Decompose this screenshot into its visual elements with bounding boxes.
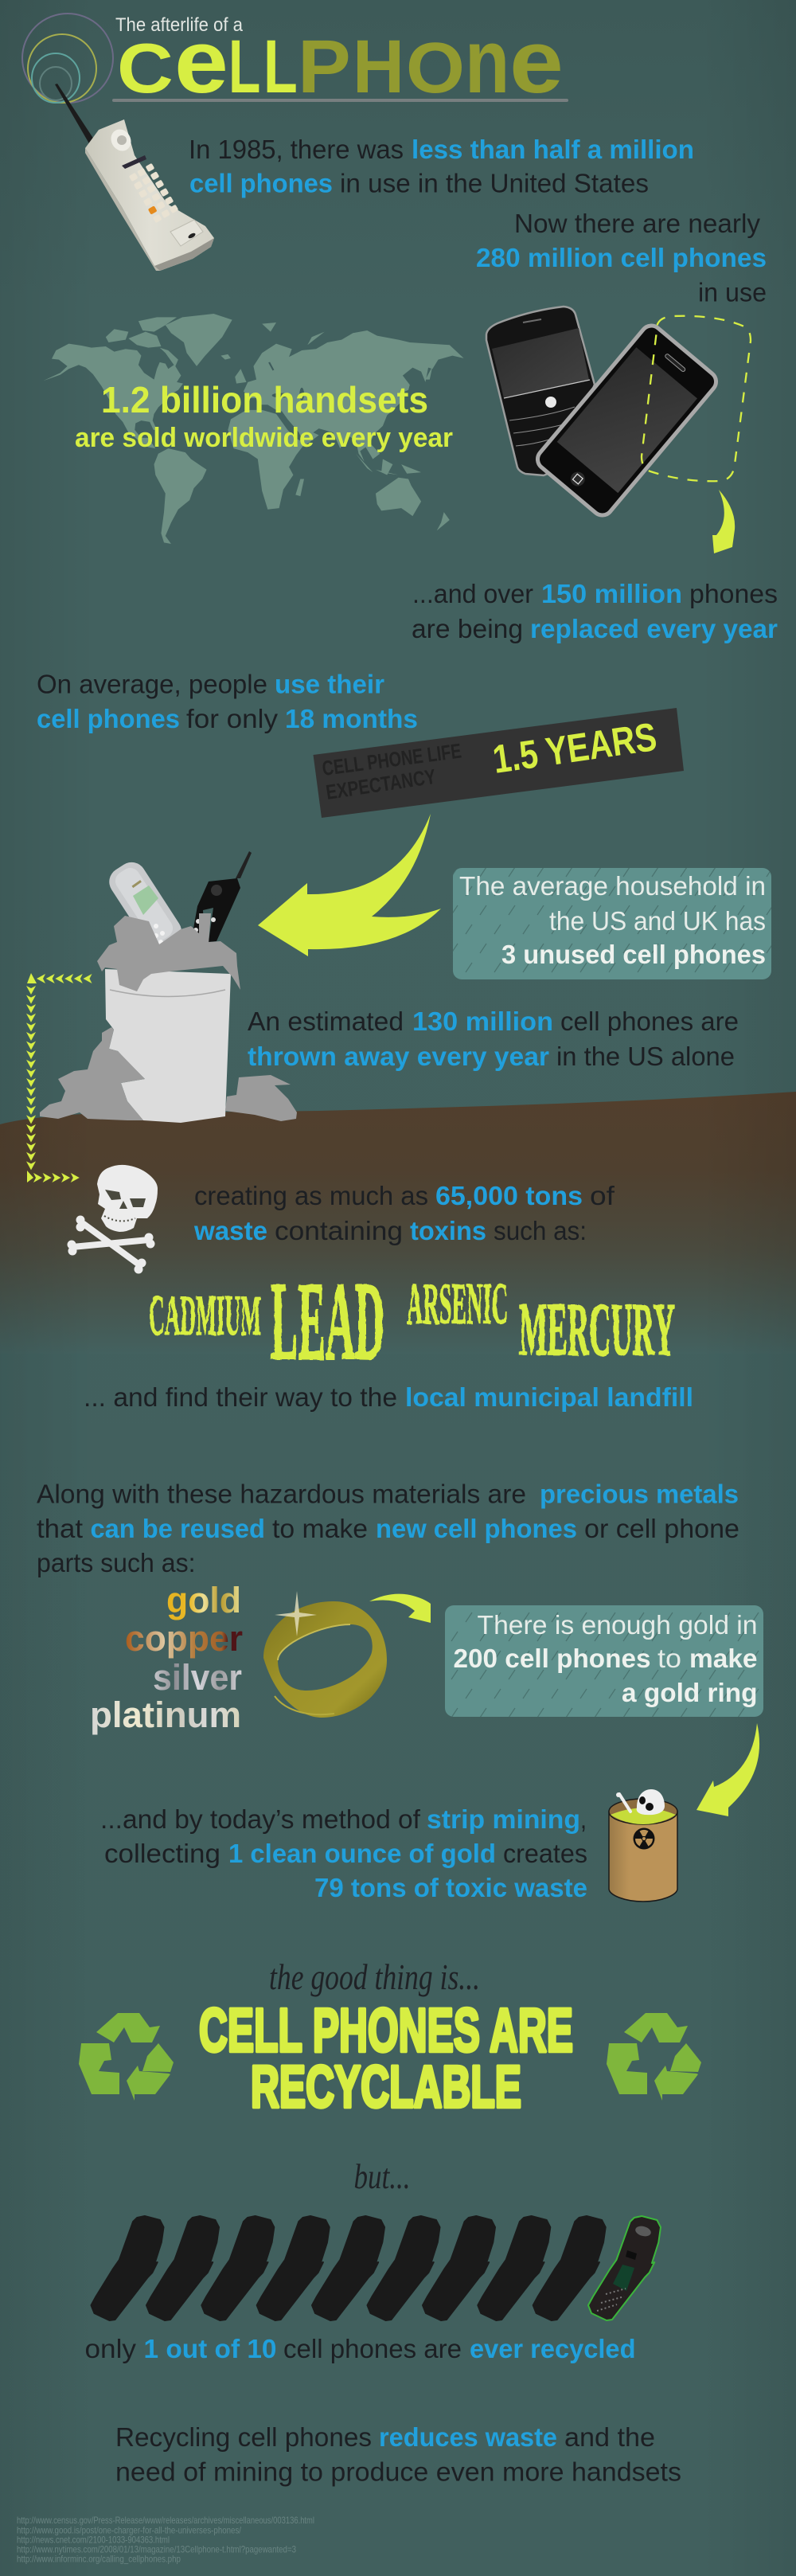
sources: http://www.good.is/post/one-charger-for-all-the-universes-phones/ [17,2524,242,2535]
text: 65,000 tons of waste: of [590,1181,615,1210]
text: 130 million thrown away: 130 million [412,1007,553,1036]
icon: blackberry phone [486,307,595,475]
arrow: ring to callout [369,1594,431,1623]
sources: http://www.census.gov/Press-Release/www/releases/archives/miscellaneous/003136.html [17,2515,314,2526]
title: L [263,23,298,108]
text: 1985 statistic [189,135,694,197]
text: strip mining: strip mining [427,1804,580,1834]
text: 65,000 tons of waste: containing [275,1216,403,1245]
metals list: copper [125,1618,243,1659]
text: closing statement [115,2422,681,2486]
icon: recycle right [607,2013,701,2101]
text: strip mining: creates [503,1839,587,1868]
title: L [228,25,260,109]
text: precious metals: can be reused [91,1514,265,1543]
text: landfill: local municipal landfill [405,1382,693,1412]
text: strip mining [100,1804,587,1902]
text: but: but... [353,2157,411,2196]
sources: http://www.nytimes.com/2008/01/13/magazine/13Cellphone-t.html?pagewanted=3 [17,2543,296,2555]
banner: life expectancy: 1.5 YEARS [490,714,659,782]
callout: gold ring: a gold ring [622,1678,758,1707]
text: precious metals: precious metals [540,1480,739,1508]
text: 1985 statistic: cell phones [189,169,333,197]
chart: 1 out of 10 phones [91,2216,661,2320]
text: 18 months: for only [186,704,279,733]
text: precious metals [37,1480,739,1577]
text: strip mining: 1 clean ounce of gold [228,1839,496,1868]
sources [17,2515,314,2564]
text: precious metals: parts such as: [37,1548,196,1577]
callout: gold ring: make [689,1644,758,1673]
icon: toxic barrel [609,1789,677,1902]
text: 280 million in use [476,209,767,307]
callout: gold ring: 200 cell phones [454,1644,651,1673]
icon: touchscreen phone [533,322,720,519]
text: 65,000 tons of waste: such as: [494,1216,587,1245]
text: 18 months: use their [275,669,384,699]
text: strip mining: , [580,1804,587,1834]
metals list: silver [153,1657,242,1698]
heading: cell phones are recyclable: CELL PHONES ARE [199,1996,573,2065]
title [112,10,568,111]
title: The afterlife of a [115,14,244,36]
text: 1.2 billion handsets: 1.2 billion handsets [101,379,428,420]
title: e [174,12,228,111]
text: 18 months: On average, people [37,669,267,699]
icon: signal rings [22,14,113,103]
icon: recycle left [79,2013,174,2101]
text: closing statement: and the [564,2422,655,2452]
arrow: dotted chain to skull [26,973,92,1182]
text: only 1 out of 10: ever recycled [470,2334,635,2363]
title: O [406,27,465,107]
text: only 1 out of 10: 1 out of 10 [143,2334,277,2363]
text: 150 million replaced: ...and over [412,579,533,608]
text: 150 million replaced: 150 million [541,579,682,608]
text: 18 months [37,669,418,733]
text: strip mining: collecting [104,1839,220,1868]
text: 18 months: 18 months [285,704,418,733]
banner: life expectancy: EXPECTANCY [324,764,437,804]
title: n [465,10,509,111]
callout: unused phones: the US and UK has [549,906,766,936]
text: precious metals: or cell phone [584,1514,739,1543]
text: 150 million replaced: are being [412,614,523,643]
text: 65,000 tons of waste [193,1181,615,1245]
arrow: to trash can [258,814,441,956]
heading: cell phones are recyclable [199,1996,573,2120]
callout: gold ring: There is enough gold in [478,1610,758,1640]
text: 65,000 tons of waste: 65,000 tons [435,1181,583,1210]
title: H [353,24,404,109]
text: 130 million thrown away: An estimated [248,1007,404,1036]
callout: unused phones: The average household in [459,871,766,901]
text: precious metals: new cell phones [376,1514,577,1543]
icon: skull and crossbones [67,1165,158,1274]
icon: trash can with phones [40,851,297,1123]
text: closing statement: need of mining to produce even more handsets [115,2457,681,2486]
text: closing statement: reduces waste [379,2422,557,2452]
toxins word group: LEAD [271,1260,384,1383]
text: only 1 out of 10: cell phones are [283,2334,462,2363]
metals list: gold [166,1580,241,1620]
text: landfill [84,1382,693,1412]
icon: vintage brick phone [55,84,214,271]
arrow: callout to barrel [696,1723,759,1816]
icon: gold ring [263,1591,387,1718]
callout: gold ring [445,1605,763,1717]
banner: life expectancy [314,708,684,818]
text: 1985 statistic: In 1985, there was [189,135,404,164]
toxins word group: ARSENIC [407,1272,508,1337]
toxins word group: CADMIUM [149,1284,261,1347]
text: 65,000 tons of waste: toxins [410,1216,486,1245]
text: 65,000 tons of waste: creating as much as [194,1181,428,1210]
sources: http://www.informinc.org/calling_cellphones.php [17,2553,181,2564]
text: 1.2 billion handsets [75,379,453,453]
text: 280 million in use: in use [698,277,767,307]
callout: unused phones [453,868,771,979]
text: 130 million thrown away: in the US alone [556,1042,735,1071]
text: 150 million replaced [412,579,778,643]
title: P [298,24,351,108]
title: e [509,12,564,111]
text: 1985 statistic: less than half a million [412,135,694,164]
text: 65,000 tons of waste: waste [193,1216,267,1245]
text: 130 million thrown away [248,1007,739,1071]
world map [43,314,464,544]
text: 280 million in use: Now there are nearly [514,209,760,238]
text: 130 million thrown away: thrown away every year [248,1042,549,1071]
text: precious metals: to make [272,1514,368,1543]
text: precious metals: Along with these hazardous materials are [37,1480,526,1508]
metals list [90,1580,243,1735]
metals list: platinum [90,1695,241,1735]
dashed outline [642,316,751,481]
text: strip mining: 79 tons of toxic waste [314,1873,587,1902]
text: closing statement: Recycling cell phones [115,2422,372,2452]
text: 1985 statistic: in use in the United States [340,169,649,197]
text: 18 months: cell phones [37,704,180,733]
text: precious metals: that [37,1514,83,1543]
text: strip mining: ...and by today’s method of [100,1804,421,1834]
callout: unused phones: 3 unused cell phones [501,940,766,969]
sources: http://news.cnet.com/2100-1033-904363.html [17,2534,170,2545]
text: 130 million thrown away: cell phones are [560,1007,739,1036]
title: C [117,29,174,107]
callout: gold ring: to [657,1644,681,1673]
text: landfill: ... and find their way to the [84,1382,397,1412]
text: 150 million replaced: replaced every year [530,614,778,643]
banner: life expectancy: CELL PHONE LIFE [321,739,462,780]
text: 150 million replaced: phones [689,579,778,608]
text: only 1 out of 10 [84,2334,635,2363]
heading: cell phones are recyclable: RECYCLABLE [251,2054,521,2120]
text: only 1 out of 10: only [84,2334,137,2363]
text: 1.2 billion handsets: are sold worldwide every year [75,423,453,453]
text: the good thing is: the good thing is... [269,1956,480,1997]
text: 280 million in use: 280 million cell phones [476,243,767,272]
arrow: to replaced phones [712,490,735,553]
toxins word group [149,1260,675,1383]
